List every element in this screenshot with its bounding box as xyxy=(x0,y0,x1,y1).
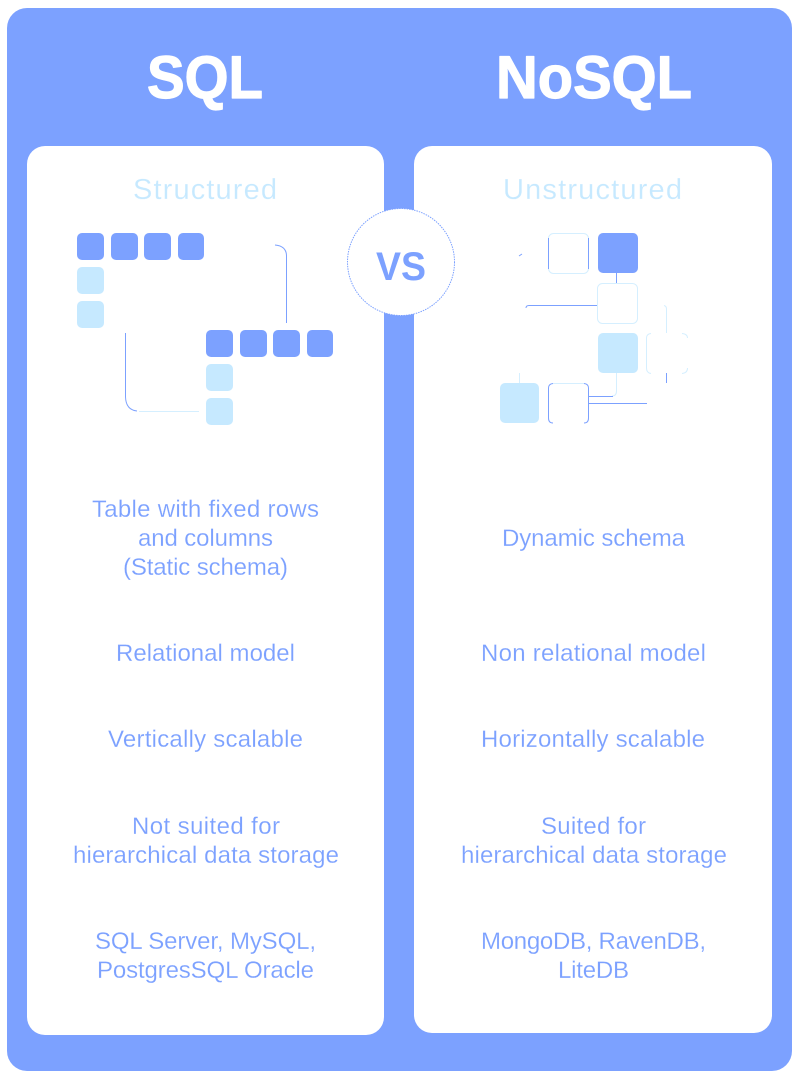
row: schema: Dynamic schema xyxy=(502,525,686,552)
row: schema xyxy=(92,496,319,581)
node: filled top xyxy=(598,233,638,273)
connector: lower xyxy=(126,333,199,412)
table: second xyxy=(206,330,333,425)
row: schema: Table with fixed rows xyxy=(92,496,319,523)
row: examples: LiteDB xyxy=(558,957,629,984)
diagram: relational tables xyxy=(77,233,333,425)
row: examples: MongoDB, RavenDB, xyxy=(481,928,706,955)
row: examples: PostgresSQL Oracle xyxy=(97,957,314,984)
row: schema: (Static schema) xyxy=(123,554,288,581)
node: light bottom xyxy=(500,383,539,423)
row: hierarchy: hierarchical data storage xyxy=(73,842,339,869)
row: hierarchy: Not suited for xyxy=(132,813,280,840)
badge: VS: VS xyxy=(376,245,426,289)
row: examples xyxy=(95,928,316,984)
node: outline right xyxy=(646,334,688,374)
row: model: Relational model xyxy=(116,640,295,667)
node: outline middle xyxy=(598,284,638,324)
row: hierarchy xyxy=(73,813,339,869)
row: scaling: Horizontally scalable xyxy=(481,726,705,753)
row: examples xyxy=(481,928,706,984)
heading: NoSQL: NoSQL xyxy=(496,44,692,111)
connector: upper xyxy=(275,245,286,323)
row: examples: SQL Server, MySQL, xyxy=(95,928,316,955)
node: light middle xyxy=(598,333,638,373)
connectors xyxy=(519,254,666,404)
row: scaling: Vertically scalable xyxy=(108,726,303,753)
row: hierarchy: hierarchical data storage xyxy=(461,842,727,869)
heading: SQL: SQL xyxy=(147,44,263,111)
node: outline bottom xyxy=(548,384,588,423)
row: schema: and columns xyxy=(138,525,273,552)
row: hierarchy xyxy=(461,813,727,869)
badge: VS xyxy=(348,208,454,316)
row: model: Non relational model xyxy=(481,640,706,667)
diagram: unstructured nodes xyxy=(500,233,688,423)
subheading: Structured: Structured xyxy=(133,174,277,206)
subheading: Unstructured: Unstructured xyxy=(503,174,682,206)
table: first xyxy=(77,233,204,328)
row: hierarchy: Suited for xyxy=(541,813,646,840)
panel: NoSQL xyxy=(414,146,772,1033)
node: outline top xyxy=(548,234,588,274)
panel: SQL xyxy=(27,146,384,1035)
